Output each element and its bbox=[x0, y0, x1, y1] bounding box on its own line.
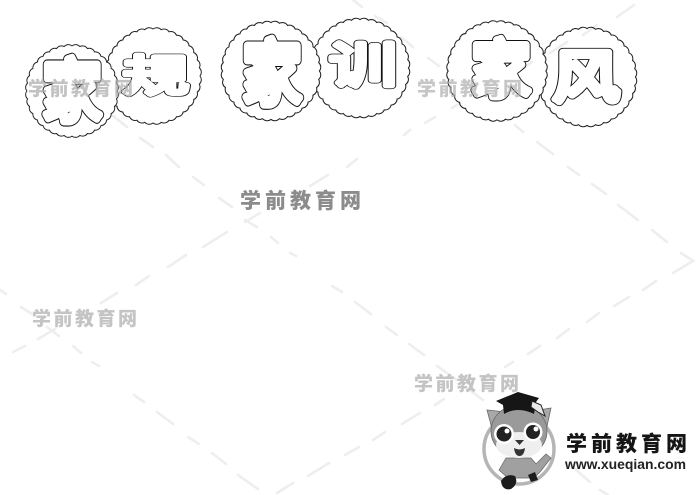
heading badge: 家 (first pair) bbox=[26, 36, 118, 137]
heading badge: 规: 规 bbox=[123, 42, 189, 104]
mascot head bbox=[491, 405, 547, 457]
watermark: centre: 学前教育网 bbox=[240, 185, 365, 215]
mascot ears bbox=[487, 408, 551, 436]
mascot body bbox=[499, 454, 551, 478]
heading badge: 家 (third pair): 家 bbox=[471, 19, 531, 110]
mascot nose and mouth bbox=[514, 440, 525, 456]
heading badge: 训: 训 bbox=[329, 26, 397, 96]
heading badge: 训: 训 bbox=[329, 26, 397, 96]
heading badge: 规: 规 bbox=[123, 42, 189, 104]
heading badge: 家 (first pair): 家 bbox=[42, 36, 102, 136]
heading badge: 风: 风 bbox=[552, 31, 620, 113]
heading badge: 家 (third pair) bbox=[447, 19, 547, 121]
heading badge: 家 (third pair): 家 bbox=[471, 19, 531, 110]
logo mascot bbox=[484, 392, 554, 489]
mascot feet bbox=[501, 472, 538, 489]
mascot cap tassel bbox=[531, 401, 545, 416]
mascot eyes bbox=[494, 422, 542, 444]
watermark: top left: 学前教育网 bbox=[28, 74, 136, 101]
watermark: lower left: 学前教育网 bbox=[32, 304, 140, 331]
heading badge: 风: 风 bbox=[552, 31, 620, 113]
heading badge: 风 bbox=[537, 27, 637, 127]
heading badge: 家 (second pair): 家 bbox=[242, 17, 302, 119]
watermark: top right: 学前教育网 bbox=[417, 74, 525, 101]
heading badge: 家 (second pair) bbox=[221, 17, 321, 121]
heading badge: 规 bbox=[105, 28, 201, 124]
logo name: 学前教育网 bbox=[566, 428, 691, 458]
heading badge: 训 bbox=[310, 18, 410, 118]
heading badge: 家 (second pair): 家 bbox=[242, 17, 302, 119]
logo url: www.xueqian.com bbox=[564, 456, 686, 472]
heading badge: 家 (first pair): 家 bbox=[42, 36, 102, 136]
mascot ring bbox=[484, 414, 554, 484]
mascot face bbox=[496, 432, 542, 458]
watermark: lower centre: 学前教育网 bbox=[414, 369, 522, 396]
mascot graduation cap bbox=[496, 392, 539, 414]
